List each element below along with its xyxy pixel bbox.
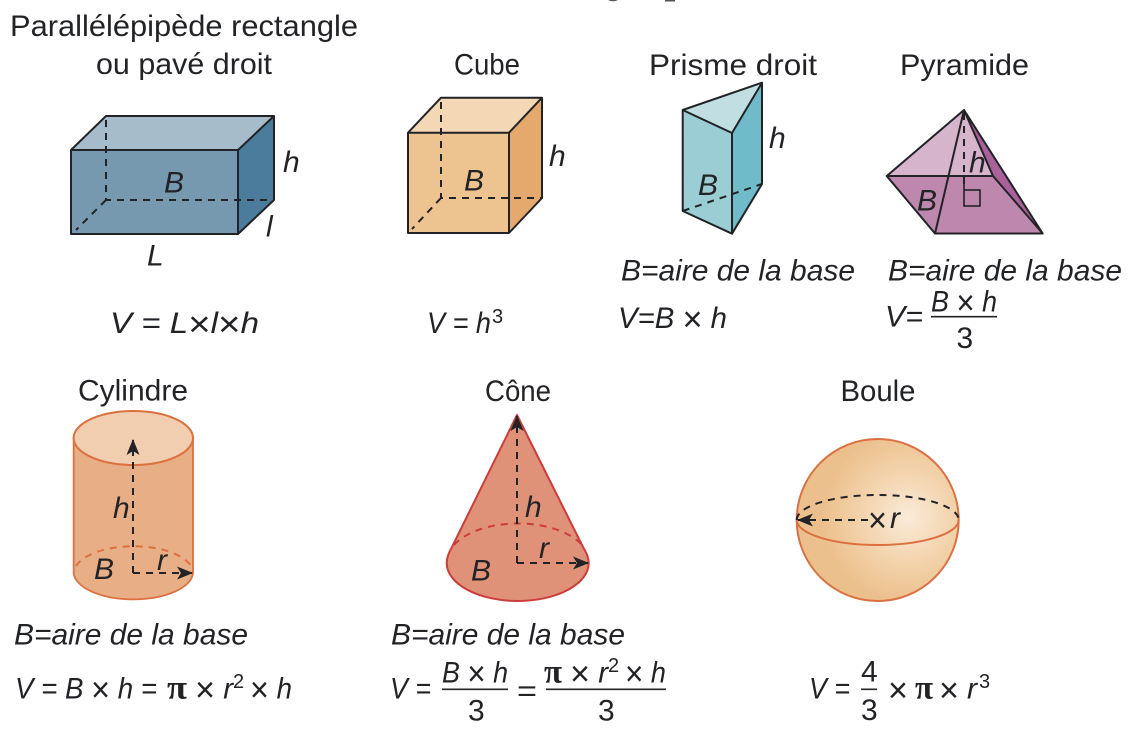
heading: prisme droit: Prisme droit — [649, 49, 818, 82]
formula: volume de la pyramide: 3 — [956, 322, 973, 355]
panel: parallélépipède rectangle — [10, 10, 358, 344]
formula: volume du cône: h — [643, 657, 666, 690]
formula: volume de la boule: 3 — [861, 694, 878, 727]
heading: boule: Boule — [840, 375, 916, 408]
heading: cube: Cube — [454, 49, 520, 82]
formula: volume du cône — [390, 654, 666, 728]
formula: volume de la boule: × — [939, 671, 959, 710]
diagram: pyramide: B — [917, 185, 937, 218]
text: définition de B: B=aire de la base — [391, 618, 625, 651]
heading: cône: Cône — [485, 375, 551, 408]
heading: pyramide: Pyramide — [900, 49, 1029, 82]
formula: volume de la boule: 3 — [979, 671, 990, 693]
formula: volume du cône: π — [544, 654, 562, 691]
diagram: boule — [797, 439, 959, 601]
diagram: pavé droit: h — [283, 146, 300, 179]
formula: volume du pavé: × — [188, 305, 211, 344]
formula: volume du cône: r — [590, 657, 609, 690]
diagram: cône: r — [539, 532, 550, 565]
formula: volume du cylindre: r — [215, 672, 234, 705]
panel: cylindre — [14, 375, 292, 709]
panel: prisme droit — [618, 49, 855, 339]
formula: volume du cône: = — [517, 675, 537, 708]
diagram: pyramide: h — [969, 147, 986, 180]
diagram: cube: B — [464, 165, 484, 198]
diagram: boule: r — [890, 502, 901, 535]
formula: volume de la pyramide — [885, 284, 997, 355]
diagram: pavé droit — [71, 116, 300, 273]
formula: volume du cylindre: V = B — [15, 672, 89, 705]
diagram: cylindre — [74, 411, 193, 599]
diagram: prisme droit: B — [698, 169, 718, 202]
formula: volume du cylindre: × — [195, 670, 215, 709]
formula: volume du cône: × — [570, 655, 590, 694]
formula: volume du cylindre — [15, 669, 292, 709]
formula: volume du cylindre: h — [269, 672, 292, 705]
formula: volume du cône: 3 — [468, 695, 485, 728]
formula: volume du cylindre: × — [91, 670, 110, 709]
formula: volume du cône: 2 — [608, 655, 619, 677]
formula: volume de la pyramide: × — [956, 284, 975, 323]
formula: volume du prisme: × — [682, 300, 702, 339]
diagram: prisme droit: h — [769, 122, 786, 155]
formula: volume de la boule: π — [915, 669, 933, 706]
formula: volume du cône: B — [442, 657, 462, 690]
formula: volume du cône: × — [467, 655, 486, 694]
diagram: boule: × — [868, 501, 887, 540]
heading: parallélépipède rectangle: ou pavé droit — [96, 48, 273, 81]
formula: volume de la boule: V = — [809, 672, 850, 705]
panel: boule — [797, 375, 990, 727]
diagram: cône: h — [525, 491, 542, 524]
diagram: cône: B — [471, 555, 491, 588]
formula: volume du pavé: l — [211, 307, 220, 340]
text: définition de B: B=aire de la base — [888, 255, 1122, 288]
formula: volume de la boule — [809, 656, 990, 727]
diagram: pavé droit: l — [266, 211, 274, 244]
panel: cône — [390, 375, 666, 728]
diagram: cube — [408, 98, 566, 233]
formula: volume du cube: 3 — [492, 306, 503, 328]
formula: volume de la pyramide: B — [931, 286, 951, 319]
formula: volume du cône: h — [486, 657, 508, 690]
formula: volume du cylindre: × — [250, 670, 269, 709]
formula: volume de la pyramide: V= — [885, 301, 923, 334]
formula: volume du cylindre: π — [167, 669, 187, 706]
formula: volume du cylindre: h = — [110, 672, 157, 705]
text: définition de B: B=aire de la base — [621, 255, 855, 288]
formula: volume du cône: × — [625, 655, 643, 694]
diagram: cylindre: h — [113, 492, 130, 525]
heading: cylindre: Cylindre — [78, 375, 188, 408]
diagram: cylindre: r — [157, 544, 168, 577]
formula: volume du prisme: h — [702, 302, 727, 335]
formula: volume de la boule: 4 — [861, 656, 878, 689]
diagram: prisme droit — [683, 83, 786, 234]
formula: volume de la pyramide: h — [975, 286, 997, 319]
formula: volume du pavé: V = L — [110, 307, 181, 340]
formula: volume du pavé: h — [241, 307, 259, 340]
panel: pyramide — [885, 49, 1122, 355]
diagram: cylindre: B — [94, 553, 114, 586]
diagram: pavé droit: B — [164, 167, 184, 200]
diagram: cube: h — [549, 140, 566, 173]
formula: volume de la boule: × — [888, 671, 908, 710]
diagram: cône — [447, 415, 589, 601]
formula: volume du cube: V = h — [427, 307, 491, 340]
diagram: pavé droit: L — [147, 240, 164, 273]
panel: cube — [408, 49, 566, 340]
formula: volume de la boule: r — [967, 672, 978, 705]
text: définition de B: B=aire de la base — [14, 618, 248, 651]
formula: volume du cône: 3 — [598, 695, 615, 728]
diagram: pyramide — [887, 110, 1043, 234]
formula: volume du cône: V = — [390, 672, 431, 705]
formula: volume du cylindre: 2 — [233, 671, 244, 693]
heading: parallélépipède rectangle: Parallélépipède rectangle — [10, 10, 358, 43]
formula: volume du prisme: V=B — [618, 302, 676, 335]
heading: parallélépipède rectangle — [10, 10, 358, 81]
formula: volume du pavé: × — [218, 305, 241, 344]
